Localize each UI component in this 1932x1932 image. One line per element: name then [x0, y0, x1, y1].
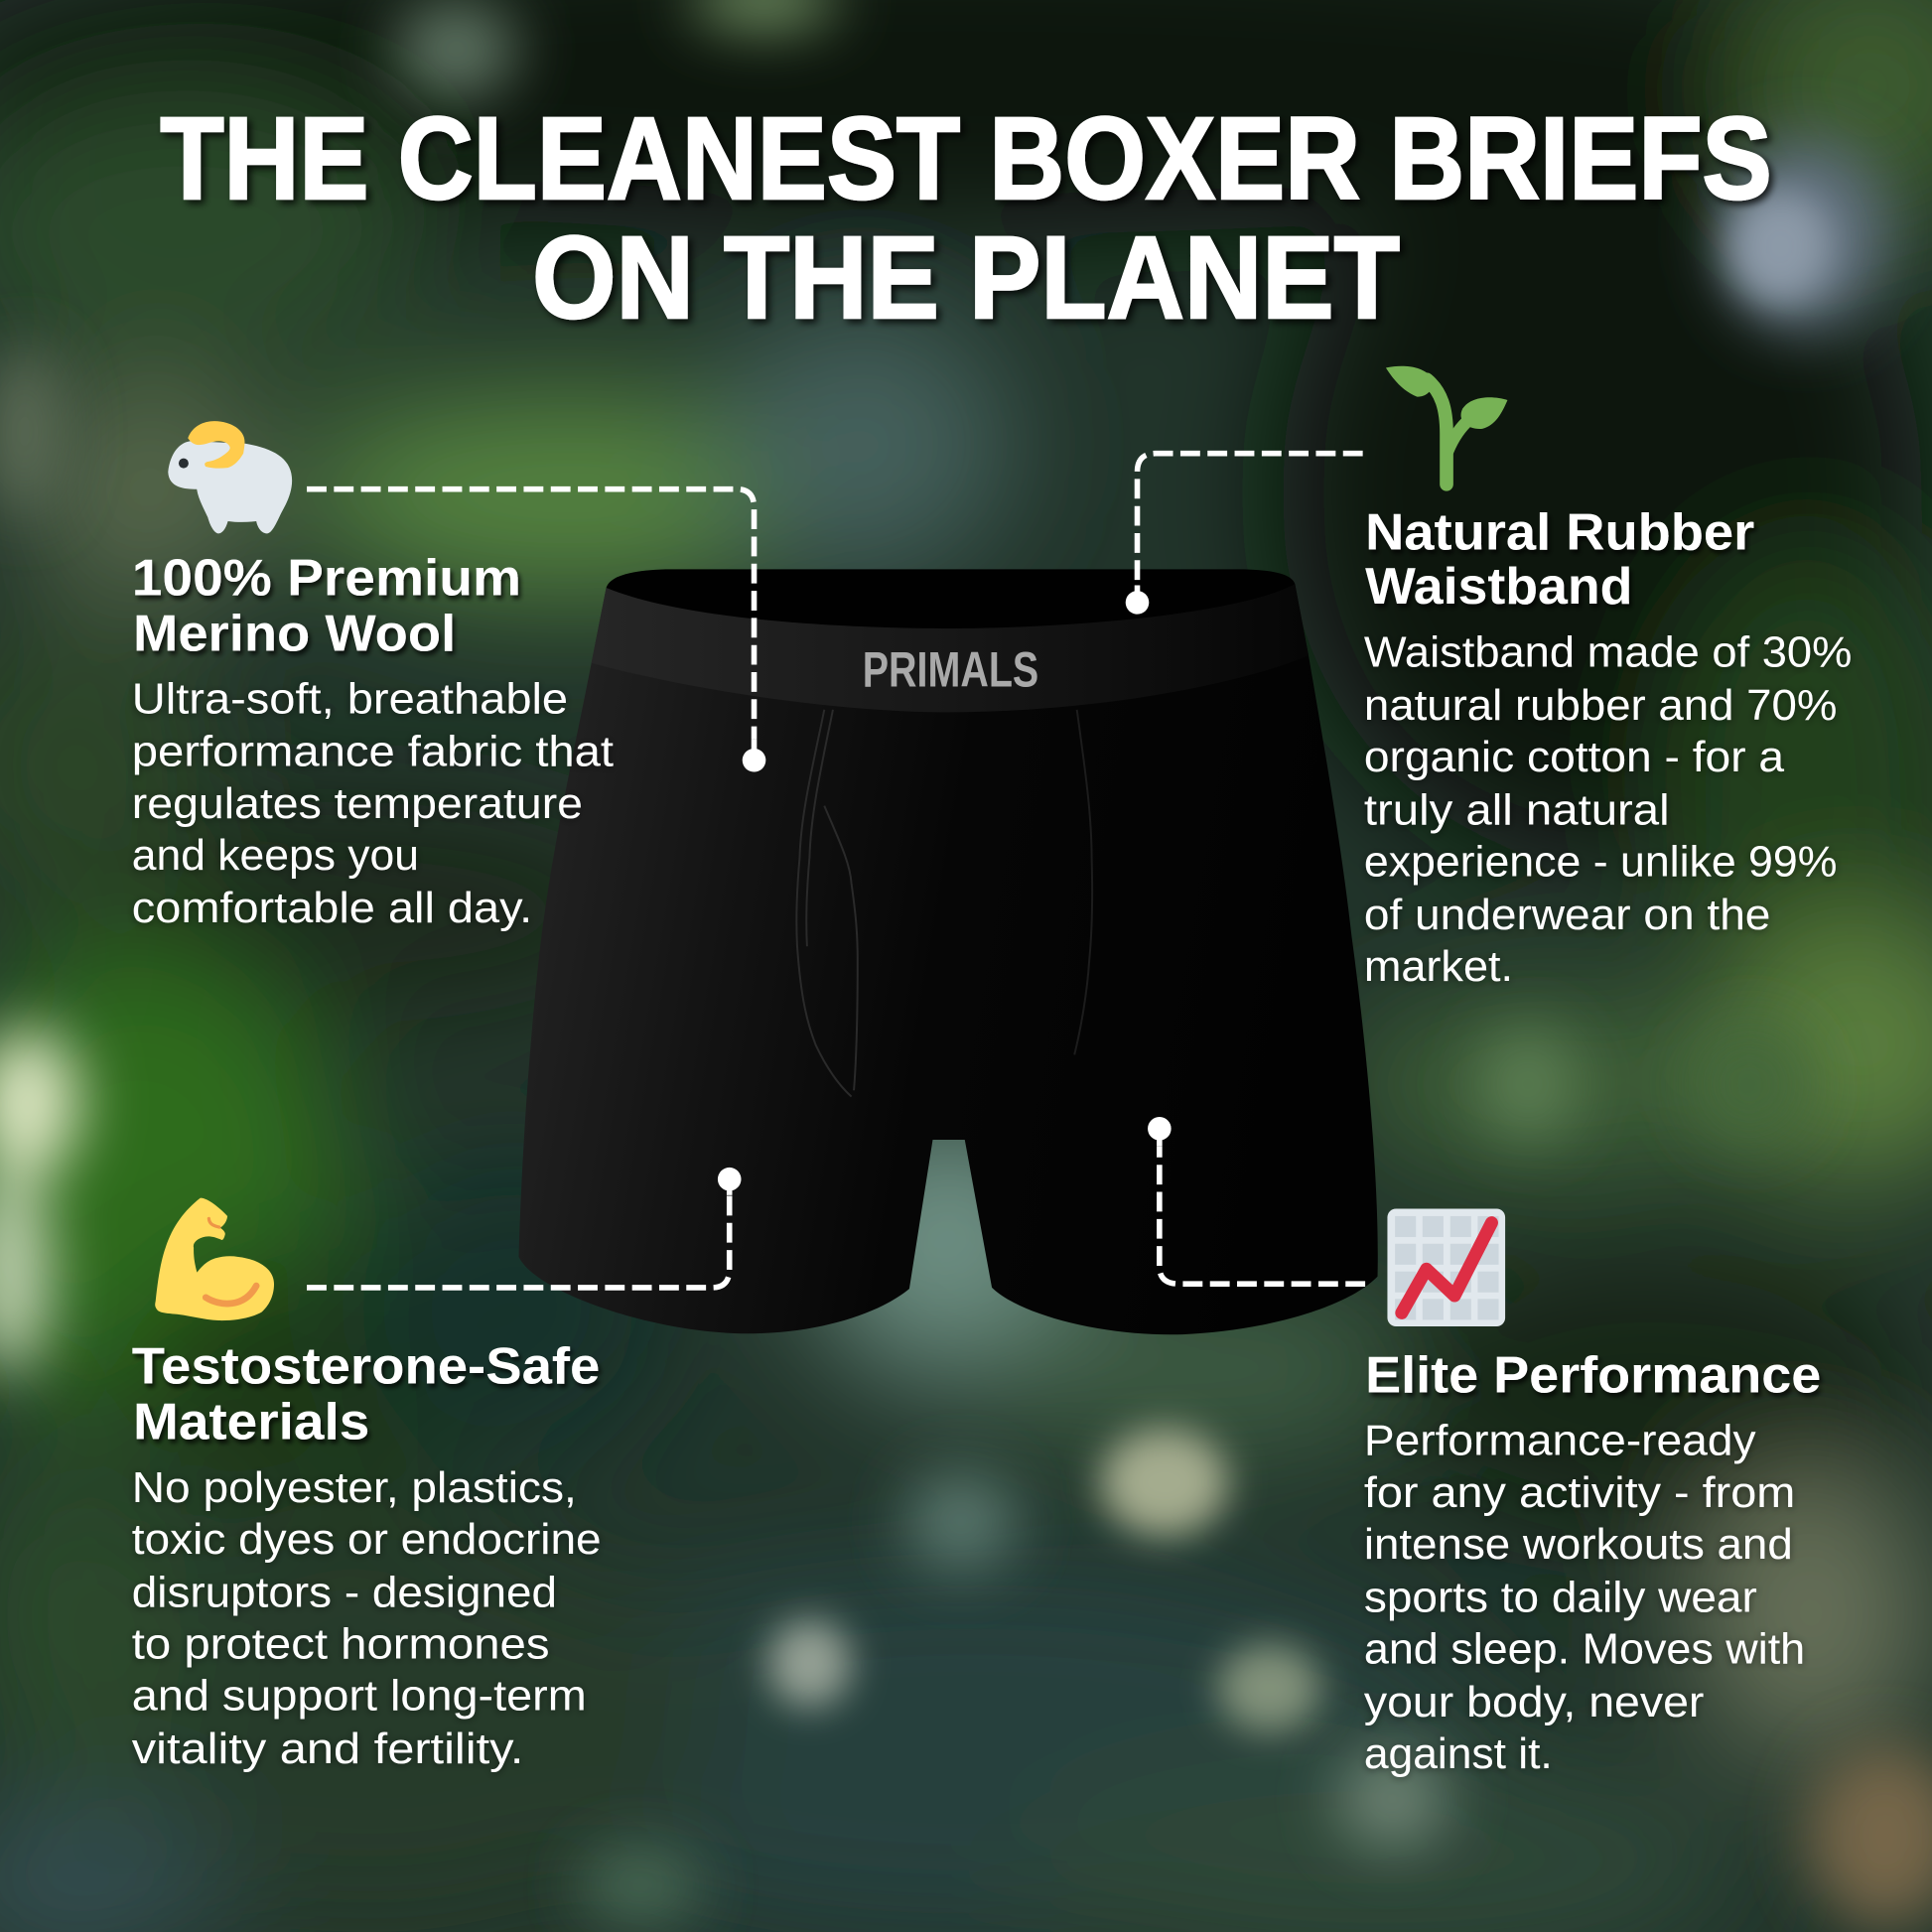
- text: merino description: and keeps you: [132, 832, 419, 880]
- text: waistband description: market.: [1364, 943, 1513, 991]
- icon: ram: [168, 421, 292, 533]
- connector: testosterone-safe: [307, 1168, 742, 1288]
- text: performance description: your body, never: [1364, 1679, 1704, 1726]
- heading: 100% Premium Merino Wool: [132, 549, 521, 662]
- text: merino description: Ultra-soft, breathable: [132, 676, 568, 724]
- fly stitching: [796, 710, 1092, 1097]
- title: ON THE PLANET: [532, 211, 1400, 343]
- connector: natural rubber waistband: [1126, 454, 1363, 615]
- panel: natural rubber waistband: [1364, 504, 1852, 991]
- text: materials description: [132, 1464, 602, 1773]
- text: materials description: No polyester, plastics,: [132, 1464, 577, 1512]
- heading: Natural Rubber Waistband: [1365, 504, 1754, 616]
- text: waistband description: of underwear on the: [1364, 892, 1770, 939]
- text: waistband description: [1364, 628, 1852, 991]
- connector: merino wool: [307, 489, 765, 772]
- text: merino description: regulates temperature: [132, 780, 583, 828]
- text: waistband description: truly all natural: [1364, 786, 1670, 834]
- text: materials description: toxic dyes or endocrine: [132, 1516, 602, 1564]
- text: waistband description: natural rubber and 70%: [1364, 682, 1837, 730]
- heading: Testosterone-Safe Materials: [132, 1338, 600, 1451]
- icon: sprout: [1386, 366, 1507, 484]
- heading: Testosterone-Safe Materials: Materials: [133, 1394, 369, 1451]
- text: performance description: sports to daily wear: [1364, 1574, 1757, 1621]
- text: merino description: comfortable all day.: [132, 885, 532, 932]
- title: [160, 92, 1772, 343]
- heading: Natural Rubber Waistband: Natural Rubber: [1365, 504, 1754, 562]
- heading: Testosterone-Safe Materials: Testosterone-Safe: [132, 1338, 600, 1396]
- heading: Elite Performance: Elite Performance: [1365, 1346, 1821, 1404]
- text: performance description: for any activity - from: [1364, 1469, 1795, 1517]
- icon: chart increasing: [1387, 1208, 1505, 1326]
- text: performance description: and sleep. Moves with: [1364, 1625, 1805, 1673]
- product: black boxer briefs: [518, 569, 1378, 1334]
- text: waistband description: organic cotton - for a: [1364, 734, 1785, 781]
- waistband: [592, 584, 1309, 712]
- text: performance description: Performance-ready: [1364, 1418, 1756, 1465]
- text: performance description: against it.: [1364, 1730, 1553, 1778]
- text: performance description: [1364, 1418, 1805, 1778]
- waistband opening: [607, 569, 1295, 628]
- text: materials description: disruptors - designed: [132, 1569, 557, 1616]
- panel: testosterone-safe materials: [132, 1338, 602, 1773]
- text: materials description: to protect hormones: [132, 1620, 550, 1668]
- heading: 100% Premium Merino Wool: 100% Premium: [132, 549, 521, 607]
- text: materials description: and support long-term: [132, 1673, 587, 1721]
- text: waistband description: experience - unlike 99%: [1364, 838, 1837, 886]
- text: merino description: [132, 676, 614, 932]
- brand label: PRIMALS: PRIMALS: [863, 641, 1038, 697]
- text: performance description: intense workouts and: [1364, 1521, 1793, 1569]
- panel: elite performance: [1364, 1346, 1821, 1778]
- text: waistband description: Waistband made of 30%: [1364, 628, 1852, 676]
- heading: Natural Rubber Waistband: Waistband: [1365, 558, 1632, 616]
- title: THE CLEANEST BOXER BRIEFS: [160, 92, 1772, 223]
- text: merino description: performance fabric that: [132, 728, 614, 775]
- connector: elite performance: [1148, 1117, 1365, 1284]
- heading: 100% Premium Merino Wool: Merino Wool: [133, 605, 456, 662]
- icon: flexed biceps: [155, 1198, 274, 1320]
- text: materials description: vitality and fertility.: [132, 1725, 523, 1773]
- panel: merino wool: [132, 549, 614, 932]
